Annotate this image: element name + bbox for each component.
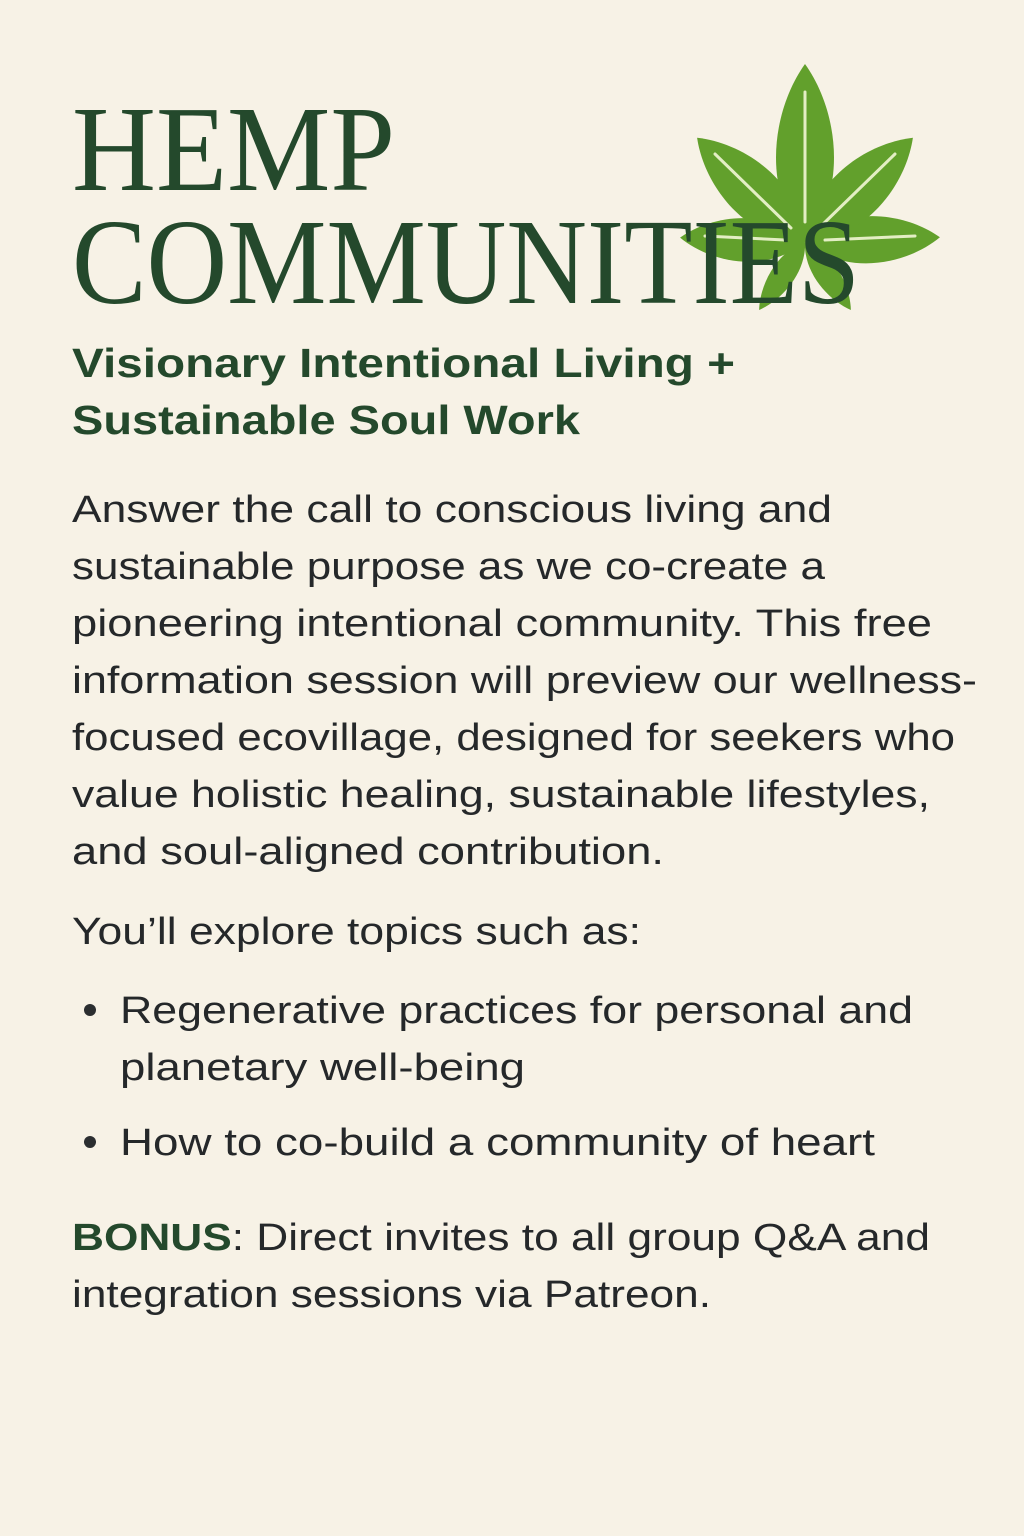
subtitle [72,340,735,443]
text block: intro paragraph: value holistic healing, sustainable lifestyles, [72,774,930,816]
text block: intro paragraph: focused ecovillage, designed for seekers who [72,717,955,759]
text block: intro paragraph: sustainable purpose as we co-create a [72,546,826,588]
title [72,82,860,330]
text block: bonus: integration sessions via Patreon. [72,1274,711,1316]
text block: intro paragraph: information session will preview our wellness- [72,660,977,702]
text block: bonus [72,1217,930,1316]
text block: intro paragraph: and soul-aligned contribution. [72,831,664,873]
subtitle: Sustainable Soul Work [72,397,580,443]
text block: bonus: BONUS : Direct invites to all group Q&A and [72,1217,930,1259]
text block: intro paragraph: Answer the call to conscious living and [72,489,832,531]
subtitle: Visionary Intentional Living + [72,340,735,386]
bullet 1 [84,990,913,1089]
bullet 2: How to co-build a community of heart [120,1122,876,1164]
bullet 1: Regenerative practices for personal and [120,990,913,1032]
text block: topics intro: You’ll explore topics such as: [72,911,641,953]
title: COMMUNITIES [72,195,860,330]
bullet 1: planetary well-being [120,1047,525,1089]
text block: intro paragraph: pioneering intentional community. This free [72,603,932,645]
bullet list [84,990,913,1164]
text block: intro paragraph [72,489,977,873]
title: HEMP [72,82,395,217]
icon: hemp leaf [679,64,941,317]
